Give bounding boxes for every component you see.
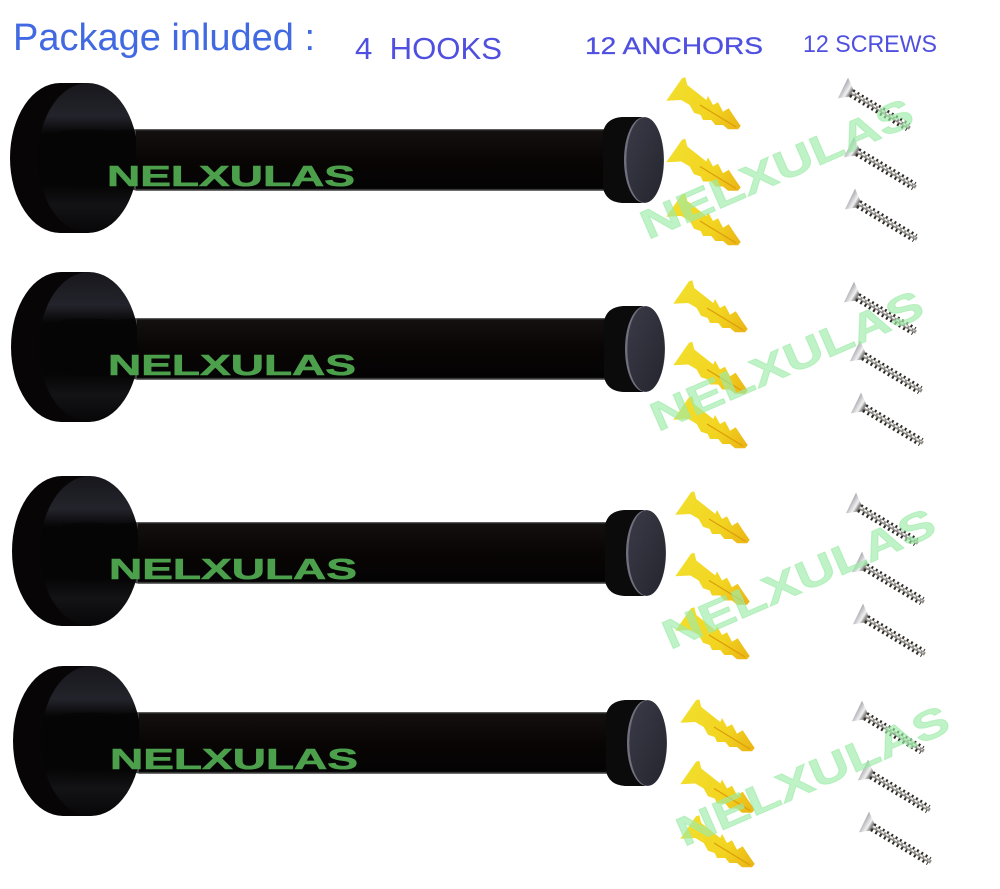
hook 2 [11, 272, 665, 422]
hook 2: NELXULAS [108, 350, 356, 382]
watermark 2: NELXULAS [643, 281, 930, 440]
anchors set 2 [673, 280, 748, 448]
heading: screws: 12 SCREWS [803, 31, 937, 58]
screws set 1 [836, 78, 923, 249]
title: Package inluded : [13, 17, 315, 59]
hook 3: NELXULAS [109, 554, 357, 586]
heading: hooks: 4 HOOKS [355, 31, 502, 66]
watermark 4: NELXULAS [669, 696, 956, 855]
watermark 1: NELXULAS [633, 89, 920, 248]
hook 4: NELXULAS [110, 744, 358, 776]
anchors set 1 [666, 77, 741, 245]
heading: anchors: 12 ANCHORS [585, 33, 763, 60]
screws set 3 [844, 493, 931, 664]
watermark 3: NELXULAS [655, 499, 942, 658]
screws set 2 [842, 282, 929, 453]
hook 4 [13, 666, 667, 816]
screws set 4 [850, 701, 937, 872]
hook 1: NELXULAS [107, 161, 355, 193]
hook 1 [10, 83, 664, 233]
hook 3 [12, 476, 666, 626]
anchors set 3 [675, 491, 750, 659]
anchors set 4 [680, 699, 755, 867]
